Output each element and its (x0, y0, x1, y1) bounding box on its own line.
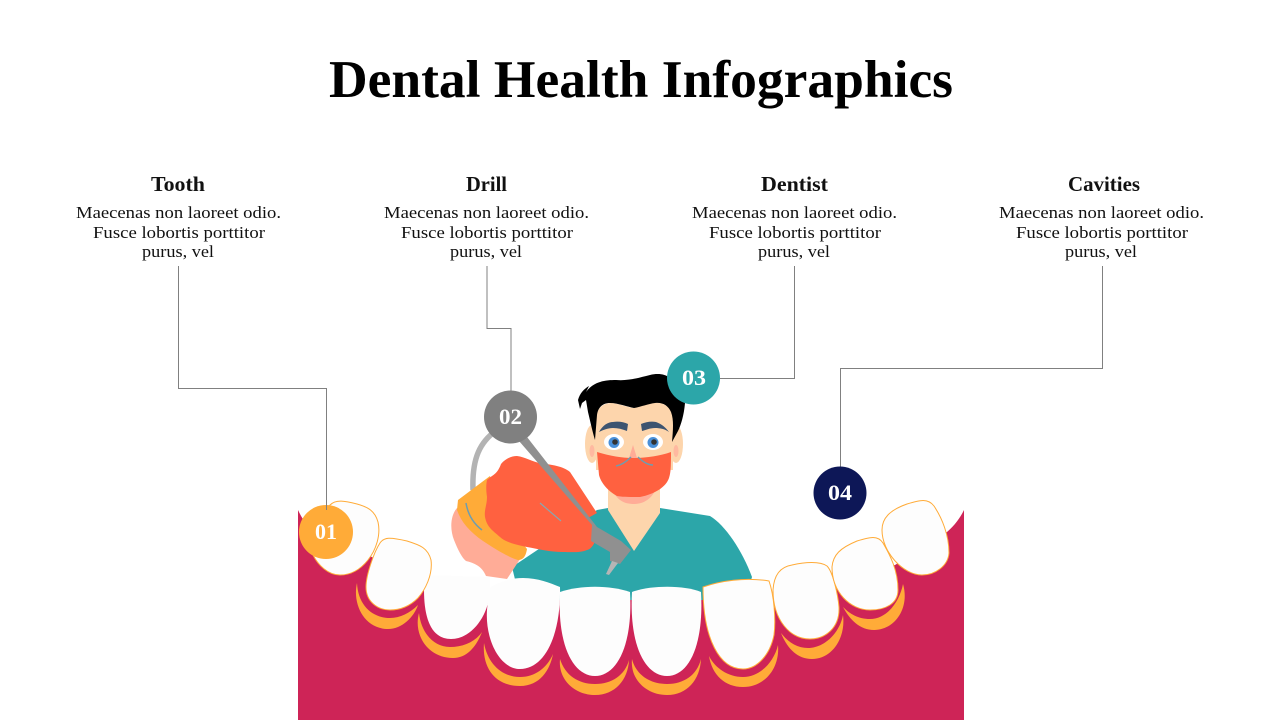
text block: cavities: Maecenas non laoreet odio. (999, 203, 1204, 222)
text block: cavities: purus, vel (1065, 242, 1137, 261)
mask creases (616, 457, 653, 466)
text block: drill (384, 172, 589, 261)
text block: tooth: Tooth (151, 172, 205, 196)
gum background (298, 510, 964, 720)
text block: tooth: Fusce lobortis porttitor (93, 223, 265, 242)
face mask (597, 452, 671, 497)
text block: cavities (999, 172, 1204, 261)
text block: tooth: Maecenas non laoreet odio. (76, 203, 281, 222)
panel: mouth illustration (298, 510, 964, 720)
badge 04 (814, 466, 866, 520)
connector lines (178, 266, 1102, 510)
drill tube (473, 433, 493, 490)
panel: hand with drill (451, 433, 631, 579)
text block: drill: Maecenas non laoreet odio. (384, 203, 589, 222)
neck (608, 485, 660, 551)
text block: dentist: purus, vel (758, 242, 830, 261)
text block: tooth (76, 172, 281, 261)
text block: cavities: Cavities (1068, 172, 1140, 196)
text block: dentist: Dentist (761, 172, 828, 196)
hair (578, 374, 685, 442)
nose (629, 445, 637, 458)
brows (599, 422, 628, 432)
panel: dentist figure (512, 374, 752, 600)
title: Dental Health Infographics (329, 51, 953, 109)
text block: tooth: purus, vel (142, 242, 214, 261)
text block: drill: purus, vel (450, 242, 522, 261)
badge 01: 01 (315, 519, 337, 544)
text block: drill: Drill (466, 172, 507, 196)
text block: dentist: Fusce lobortis porttitor (709, 223, 881, 242)
arm (451, 508, 522, 579)
shirt (512, 508, 752, 600)
text block: dentist: Maecenas non laoreet odio. (692, 203, 897, 222)
mask shadow (612, 488, 656, 504)
eyes (604, 434, 624, 450)
badge 02 (484, 390, 537, 444)
text block: drill: Fusce lobortis porttitor (401, 223, 573, 242)
drill body (519, 437, 631, 564)
cuff crease (466, 503, 482, 530)
orange gum shadows (356, 583, 905, 695)
ears (585, 425, 599, 463)
badge 04: 04 (828, 480, 852, 505)
badge 01 (299, 505, 353, 559)
text block: cavities: Fusce lobortis porttitor (1016, 223, 1188, 242)
orange cuff (457, 476, 527, 560)
glove crease (540, 503, 561, 521)
badge 03 (667, 352, 720, 404)
text block: dentist (692, 172, 897, 261)
glove (485, 456, 597, 552)
panel: teeth (310, 500, 949, 676)
badge 02: 02 (499, 404, 522, 429)
drill tip (606, 561, 618, 575)
badge 03: 03 (682, 365, 706, 390)
face (596, 403, 673, 470)
